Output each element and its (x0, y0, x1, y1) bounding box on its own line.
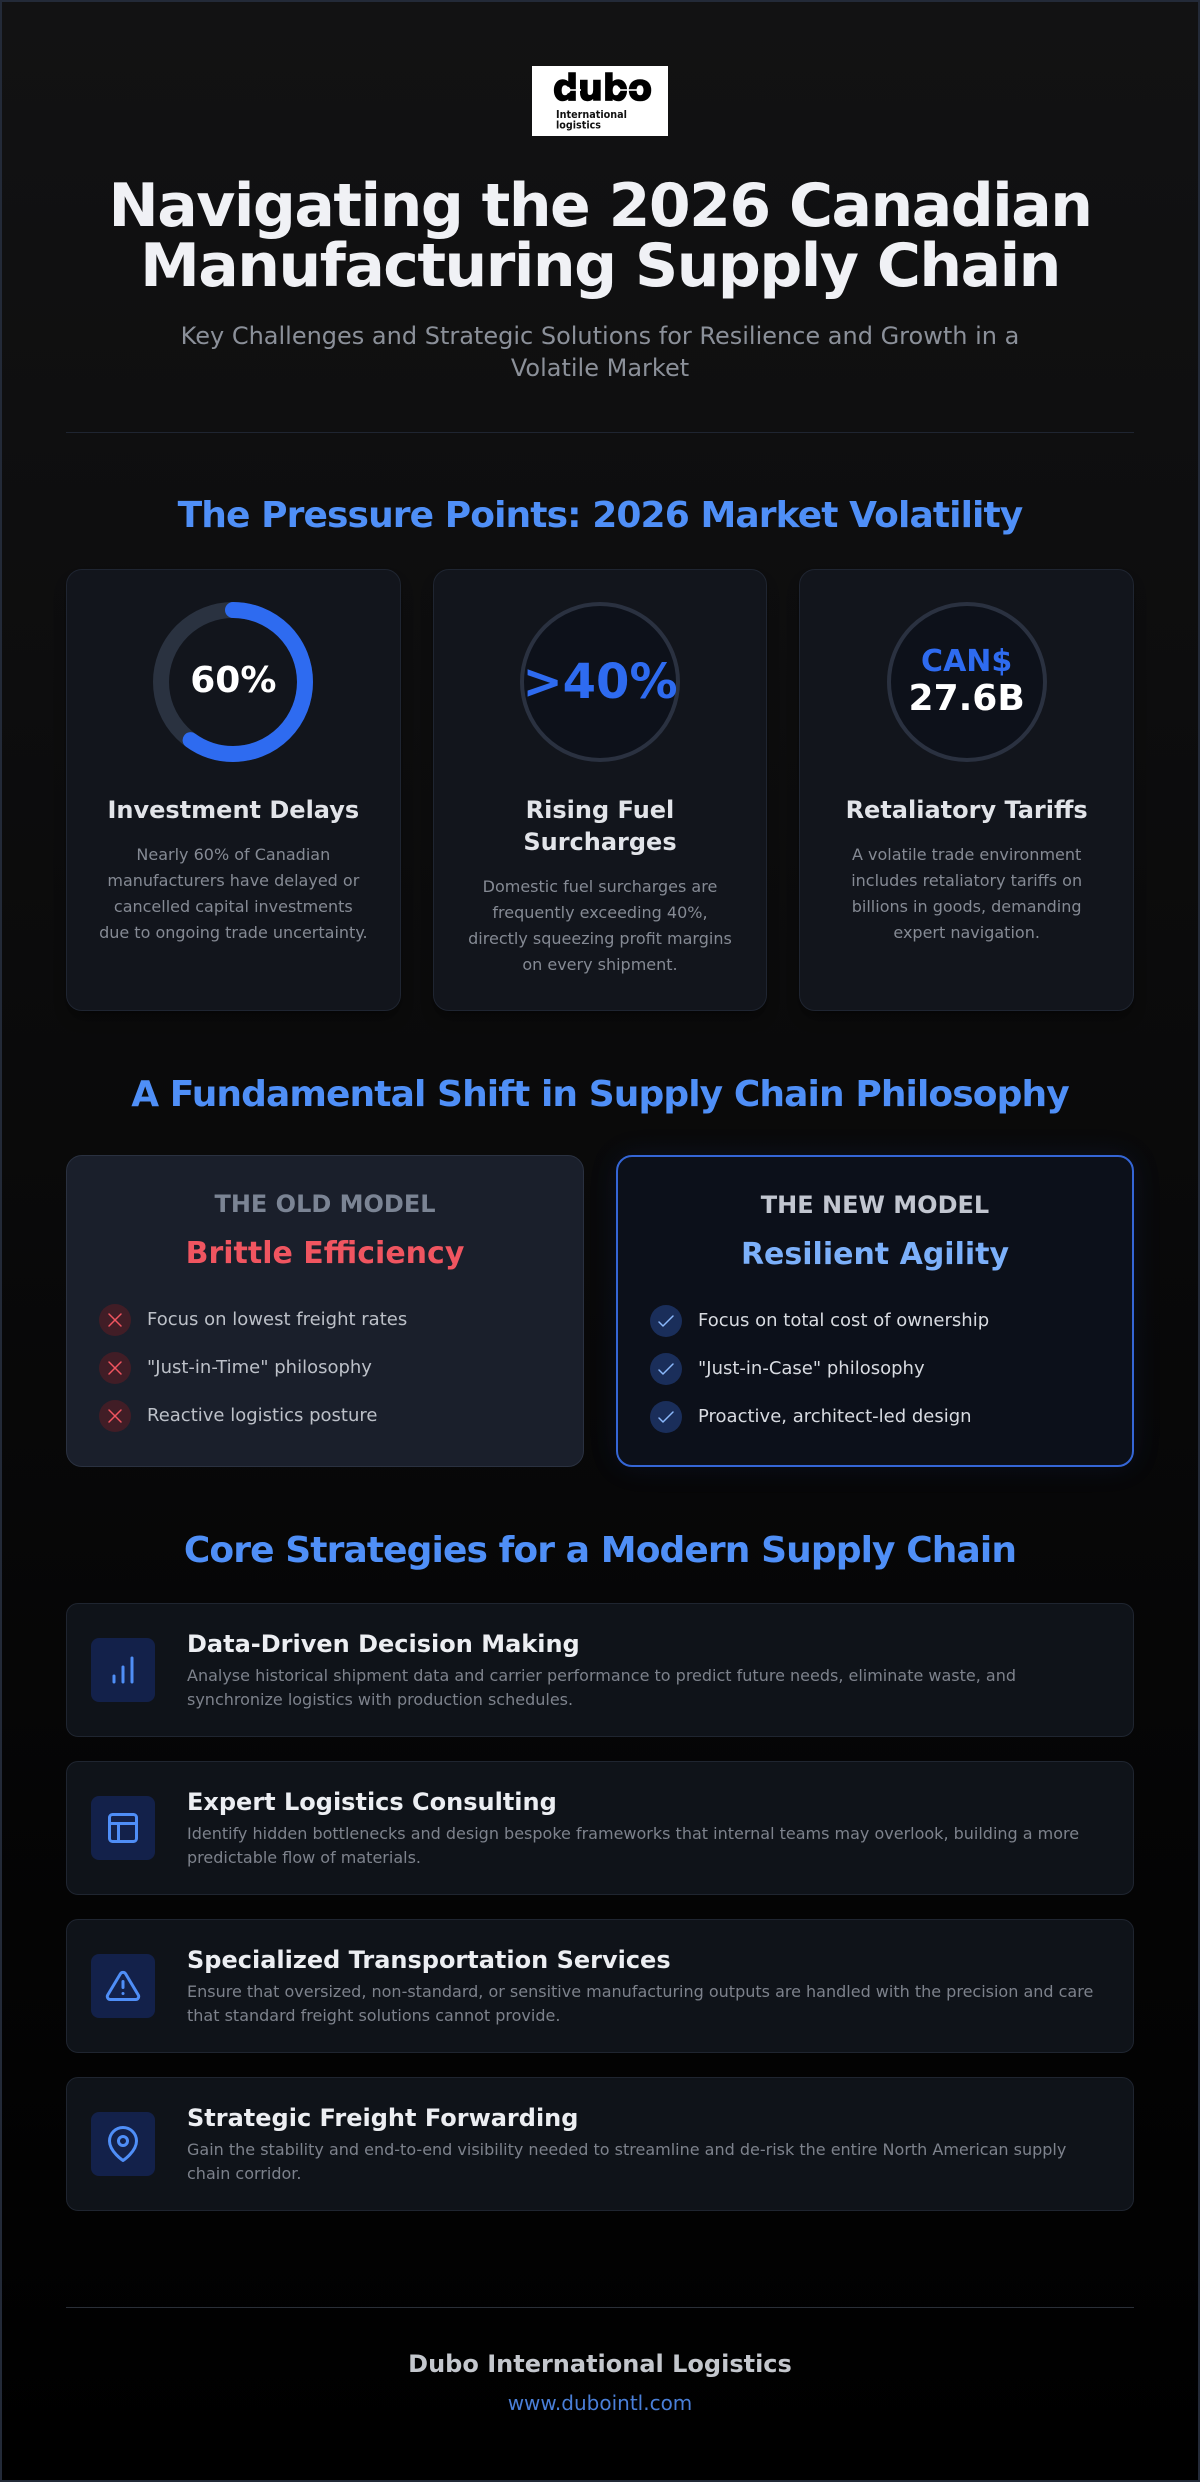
card text: includes retaliatory tariffs on (851, 871, 1082, 890)
stat circle: CAN$ 27.6B (887, 602, 1047, 762)
strategy text: chain corridor. (187, 2164, 301, 2183)
item: just in time: "Just-in-Time" philosophy (147, 1357, 372, 1378)
item: just in case (650, 1353, 925, 1385)
card text: Nearly 60% of Canadian (136, 845, 330, 864)
strategy text: predictable flow of materials. (187, 1848, 421, 1867)
panel: investment delays (66, 569, 401, 1011)
card text: on every shipment. (522, 955, 678, 974)
icon: map pin (91, 2112, 155, 2176)
item: just in case: "Just-in-Case" philosophy (698, 1358, 925, 1379)
item: total cost: Focus on total cost of ownership (698, 1310, 989, 1331)
strategy text: Strategic Freight Forwarding (187, 2104, 578, 2132)
card text: billions in goods, demanding (852, 897, 1082, 916)
card text (851, 845, 1082, 942)
strategy text: Identify hidden bottlenecks and design bespoke frameworks that internal teams may overlook, building a more (187, 1824, 1079, 1843)
card text: Domestic fuel surcharges are (483, 877, 717, 896)
panel: data-driven (66, 1603, 1134, 1737)
subtitle: Key Challenges and Strategic Solutions for Resilience and Growth in a (181, 322, 1019, 350)
strategy text: that standard freight solutions cannot provide. (187, 2006, 560, 2025)
stat circle: CAN$ 27.6B: 27.6B (909, 678, 1025, 719)
strategy text: Specialized Transportation Services (187, 1946, 671, 1974)
card text: expert navigation. (893, 923, 1040, 942)
card title: Retaliatory Tariffs (846, 796, 1088, 824)
item: reactive posture (99, 1400, 377, 1432)
icon: layout (91, 1796, 155, 1860)
old model label: THE OLD MODEL (214, 1190, 436, 1218)
strategy text (187, 1630, 1016, 1709)
card title: Rising Fuel (526, 796, 674, 824)
new model list (650, 1305, 989, 1433)
heading: pressure points: The Pressure Points: 2026 Market Volatility (178, 495, 1022, 536)
strategy text (187, 1946, 1093, 2025)
logo (532, 66, 668, 136)
card text: due to ongoing trade uncertainty. (99, 923, 368, 942)
donut chart: 60%: 60% (190, 660, 276, 701)
strategy text (187, 2104, 1066, 2183)
strategy text: Gain the stability and end-to-end visibility needed to streamline and de-risk the entire North American supply (187, 2140, 1066, 2159)
card title: Investment Delays (107, 796, 359, 824)
item: proactive design: Proactive, architect-led design (698, 1406, 972, 1427)
new model label: THE NEW MODEL (761, 1191, 989, 1219)
item: proactive design (650, 1401, 972, 1433)
item: lowest freight rates: Focus on lowest freight rates (147, 1309, 407, 1330)
heading: core strategies: Core Strategies for a Modern Supply Chain (184, 1530, 1016, 1571)
item: just in time (99, 1352, 372, 1384)
title (109, 171, 1091, 301)
card text: frequently exceeding 40%, (492, 903, 708, 922)
strategy text: Data-Driven Decision Making (187, 1630, 580, 1658)
heading: philosophy shift: A Fundamental Shift in Supply Chain Philosophy (131, 1074, 1069, 1115)
strategy text: synchronize logistics with production schedules. (187, 1690, 573, 1709)
title: Manufacturing Supply Chain (140, 231, 1060, 301)
item: reactive posture: Reactive logistics posture (147, 1405, 377, 1426)
logo: logistics (556, 120, 601, 132)
donut chart: 60% (153, 602, 313, 762)
new model title: Resilient Agility (741, 1237, 1009, 1272)
stat circle: >40% (520, 602, 680, 762)
panel: consulting (66, 1761, 1134, 1895)
panel: freight forwarding (66, 2077, 1134, 2211)
card text: directly squeezing profit margins (468, 929, 732, 948)
item: lowest freight rates (99, 1304, 407, 1336)
card title (523, 796, 677, 856)
card text: cancelled capital investments (114, 897, 353, 916)
item: total cost (650, 1305, 989, 1337)
strategy text: Analyse historical shipment data and carrier performance to predict future needs, eliminate waste, and (187, 1666, 1016, 1685)
card text: A volatile trade environment (852, 845, 1081, 864)
card title: Surcharges (523, 828, 677, 856)
strategy text: Expert Logistics Consulting (187, 1788, 557, 1816)
footer website: www.dubointl.com (508, 2391, 692, 2415)
subtitle: Volatile Market (511, 354, 689, 382)
strategy text: Ensure that oversized, non-standard, or sensitive manufacturing outputs are handled with the precision and care (187, 1982, 1093, 2001)
subtitle (181, 322, 1019, 382)
logo: International (556, 109, 627, 121)
old model list (99, 1304, 407, 1432)
title: Navigating the 2026 Canadian (109, 171, 1091, 241)
old model title: Brittle Efficiency (186, 1236, 464, 1271)
icon: alert triangle (91, 1954, 155, 2018)
card text (99, 845, 368, 942)
card text (468, 877, 732, 974)
panel: fuel surcharges (433, 569, 767, 1011)
footer company name: Dubo International Logistics (408, 2350, 792, 2378)
logo: dubo (553, 68, 652, 109)
stat circle: CAN$ 27.6B: CAN$ (921, 644, 1012, 679)
icon: bar chart (91, 1638, 155, 1702)
panel: retaliatory tariffs (799, 569, 1134, 1011)
strategy text (187, 1788, 1079, 1867)
panel: new model (616, 1155, 1134, 1467)
panel: specialized transport (66, 1919, 1134, 2053)
card text: manufacturers have delayed or (107, 871, 359, 890)
stat circle: >40%: >40% (522, 654, 678, 710)
panel: old model (66, 1155, 584, 1467)
